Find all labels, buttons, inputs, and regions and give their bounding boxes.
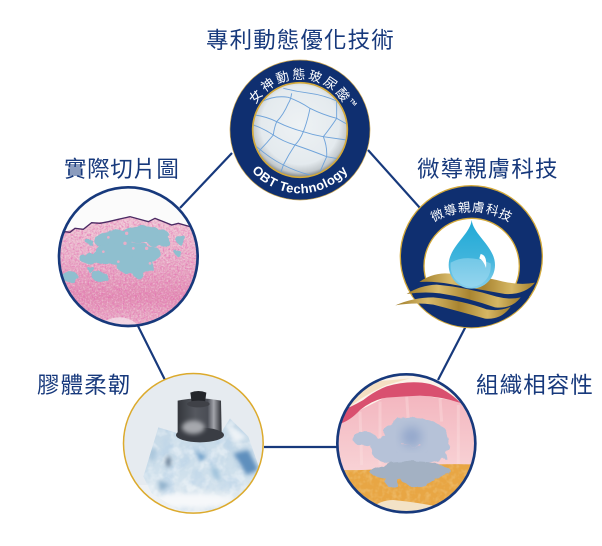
cream skin surface (350, 378, 409, 407)
hyaluronic sphere (253, 83, 348, 177)
weight knob (190, 391, 206, 402)
label: 實際切片圖: 實際切片圖 (64, 157, 180, 182)
badge: 微導親膚科技: 微導親膚科技 (430, 201, 512, 222)
region above the skin (66, 213, 189, 232)
dermis (338, 396, 474, 470)
gold waves (395, 273, 535, 319)
gel (353, 418, 449, 464)
lower fascia (376, 500, 433, 511)
weight body (178, 398, 222, 436)
illustration: gel in skin layers (330, 372, 483, 515)
gel block (144, 418, 258, 500)
fat layer (344, 464, 471, 506)
badge: OBT Technology (230, 60, 370, 200)
label: 組織相容性: 組織相容性 (476, 373, 594, 398)
badge: OBT Technology: OBT Technology (254, 166, 347, 194)
skin surface line (64, 216, 190, 234)
label: 膠體柔韌: 膠體柔韌 (37, 373, 131, 398)
connector lines between circles (138, 150, 466, 447)
curved text: OBT Technology (237, 130, 363, 193)
lower navy field (412, 282, 530, 328)
trademark mark: TM (348, 98, 358, 108)
curved text: 女神動態玻尿酸 (249, 79, 351, 130)
label: 微導親膚科技: 微導親膚科技 (417, 157, 559, 182)
title: 專利動態優化技術 (206, 28, 395, 53)
epidermis red band (338, 382, 461, 424)
photo: histology slice (58, 186, 199, 328)
water drop (449, 220, 495, 289)
badge: OBT Technology: 女神動態玻尿酸 (250, 68, 350, 104)
photo: weight on gel block (122, 370, 268, 518)
pink tissue (60, 217, 196, 324)
curved text: 微導親膚科技 (398, 212, 545, 285)
hyaluronic deposits (62, 226, 186, 282)
badge: 微導親膚科技 (396, 185, 543, 328)
pink gaps inside deposits (102, 232, 151, 265)
